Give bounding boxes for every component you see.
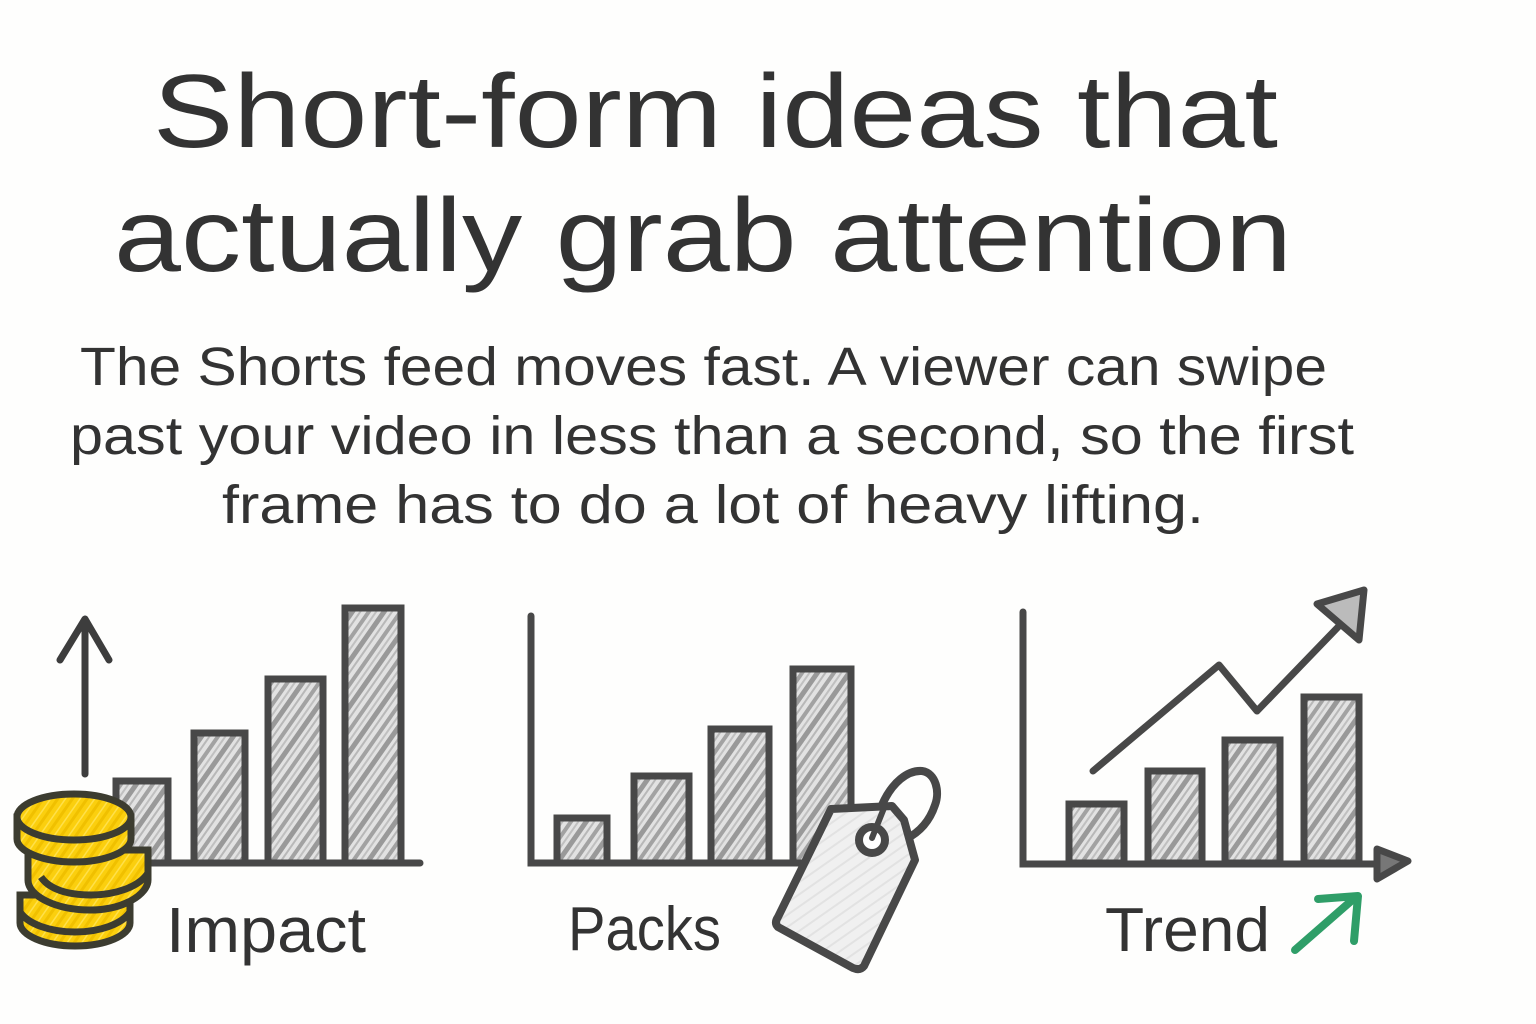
intro paragraph bbox=[70, 337, 1354, 535]
label: impact: Impact bbox=[166, 894, 366, 966]
icon: coins bbox=[17, 794, 148, 946]
panel: trend chart bbox=[1023, 590, 1408, 965]
icon: axis arrow bbox=[1377, 849, 1408, 879]
panel: impact chart bbox=[17, 608, 420, 966]
intro paragraph: The Shorts feed moves fast. A viewer can swipe bbox=[80, 337, 1327, 397]
trend axes bbox=[1023, 612, 1385, 864]
panel: packs chart bbox=[531, 616, 937, 969]
impact axis bbox=[130, 860, 420, 866]
intro paragraph: past your video in less than a second, so the first bbox=[70, 406, 1354, 466]
packs axes bbox=[531, 616, 830, 863]
label: trend: Trend bbox=[1105, 896, 1270, 965]
icon: up arrow bbox=[60, 619, 109, 774]
title: actually grab attention bbox=[114, 178, 1292, 294]
title: Short-form ideas that bbox=[153, 54, 1278, 170]
label: packs: Packs bbox=[568, 895, 721, 964]
trend line arrow bbox=[1093, 590, 1364, 771]
trend bars bbox=[1069, 697, 1359, 863]
title bbox=[114, 54, 1292, 294]
icon: price tag bbox=[776, 771, 937, 969]
intro paragraph: frame has to do a lot of heavy lifting. bbox=[222, 475, 1204, 535]
icon: green arrow bbox=[1295, 896, 1358, 950]
impact bars bbox=[116, 608, 401, 863]
packs bars bbox=[557, 669, 851, 863]
